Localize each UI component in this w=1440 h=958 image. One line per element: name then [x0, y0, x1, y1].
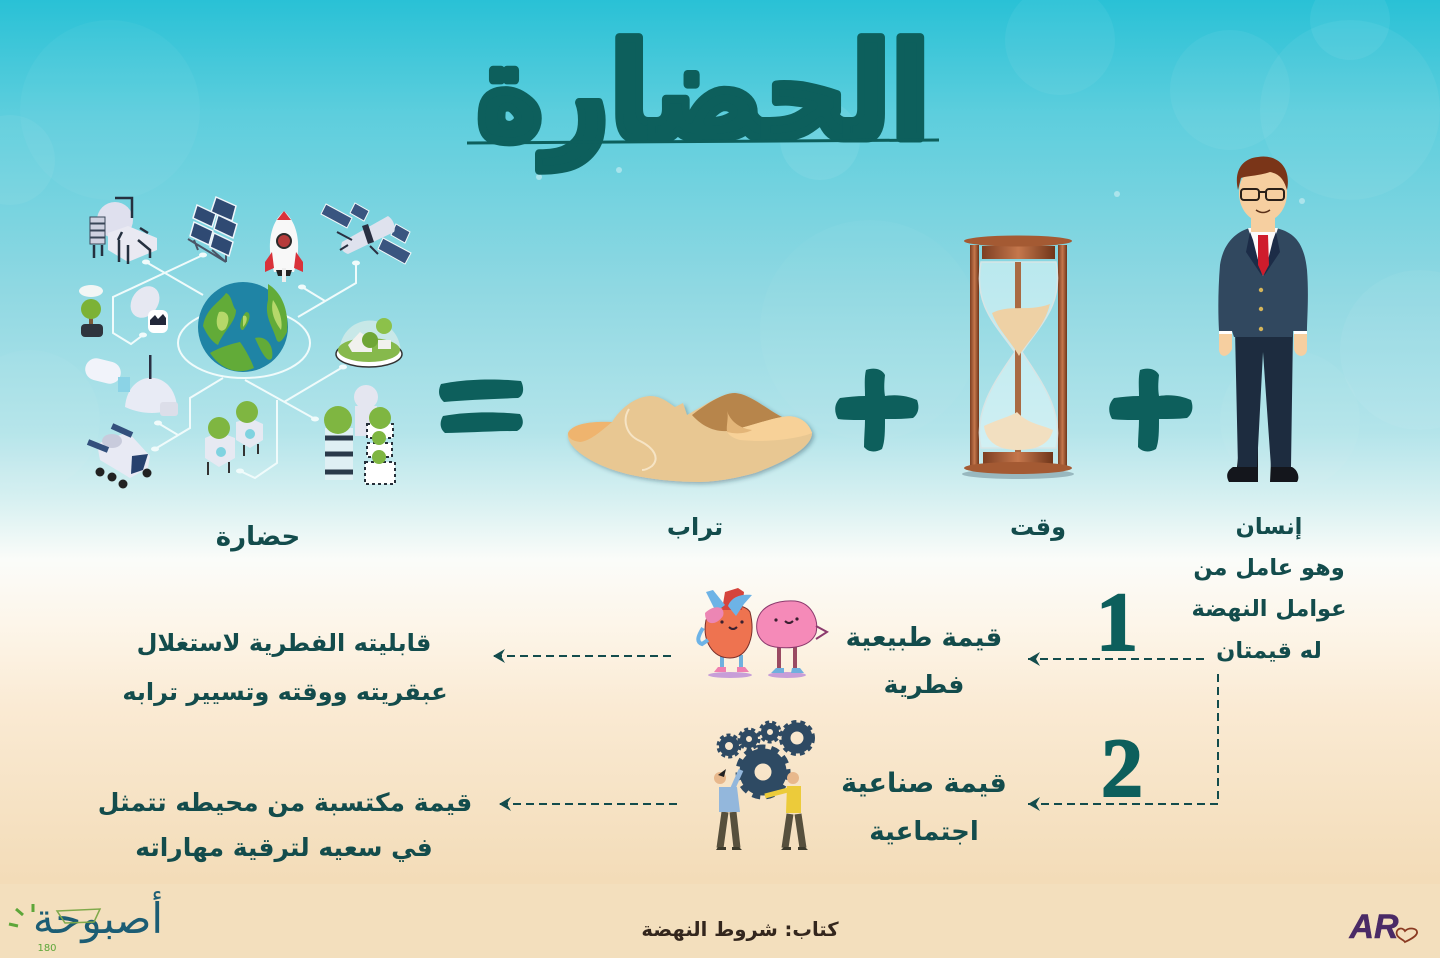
arrow: human to value 1 [1028, 658, 1204, 660]
text block: human: له قيمتان [1216, 638, 1322, 664]
text block: natural value: قيمة طبيعية [846, 623, 1002, 653]
footer band [0, 884, 1440, 958]
icon: green towers [324, 385, 395, 484]
text block: natural value: فطرية [884, 670, 964, 700]
logo: Osbouhia: أصبوحة [33, 891, 163, 943]
text block: natural value description: قابليته الفطرية لاستغلال [137, 629, 431, 657]
text block: human: إنسان [1236, 514, 1302, 540]
icon: dome [83, 355, 178, 416]
icon: industrial tank [90, 198, 157, 264]
text block: industrial value [841, 768, 1007, 847]
label: civilization: حضارة [216, 522, 300, 552]
number 1: 1 [1096, 576, 1138, 669]
text block: human [1191, 514, 1347, 664]
logo: Osbouhia: 180 [37, 943, 57, 954]
icon: man in suit [1218, 157, 1308, 482]
icon: biodome [336, 318, 402, 367]
plus sign 1 [835, 369, 918, 451]
source text: كتاب: شروط النهضة [641, 918, 839, 941]
icon: dish [125, 281, 168, 333]
text block: acquired value description: في سعيه لترقية مهاراته [135, 833, 433, 863]
text block: human: عوامل النهضة [1191, 596, 1347, 622]
label: dust: تراب [667, 513, 723, 541]
earth [198, 282, 288, 372]
logo: AR: AR [1348, 908, 1399, 946]
icon: civilization network [79, 197, 411, 488]
text block: natural value [846, 623, 1002, 700]
text block: acquired value description [98, 788, 472, 863]
label: time: وقت [1010, 513, 1066, 541]
number 2: 2 [1101, 722, 1143, 815]
icon: sand dune [568, 393, 812, 482]
arrow: value 2 to description [499, 803, 677, 805]
icon: green pods [205, 401, 263, 475]
equals sign [439, 379, 523, 433]
arrow: human to value 2 [1028, 674, 1218, 804]
text block: industrial value: قيمة صناعية [841, 768, 1007, 799]
icon: rover [88, 426, 152, 488]
icon: solar panels [188, 197, 237, 262]
text block: acquired value description: قيمة مكتسبة من محيطه تتمثل [98, 788, 472, 818]
icon: heart and brain characters [698, 588, 827, 678]
icon: rocket [265, 211, 303, 282]
network lines [113, 252, 360, 478]
text block: industrial value: اجتماعية [869, 817, 979, 847]
text block: natural value description [122, 629, 448, 706]
plus sign 2 [1109, 369, 1192, 451]
text block: natural value description: عبقريته ووقته وتسيير ترابه [122, 678, 448, 706]
icon: hourglass [962, 236, 1074, 479]
logo: Osbouhia [9, 891, 163, 954]
title: الحضارة [476, 16, 930, 170]
icon: gears and two workers [714, 722, 814, 850]
text block: human: وهو عامل من [1193, 555, 1345, 581]
arrow: value 1 to description [493, 655, 671, 657]
icon: tree pod [79, 285, 103, 337]
icon: satellite [321, 203, 411, 264]
